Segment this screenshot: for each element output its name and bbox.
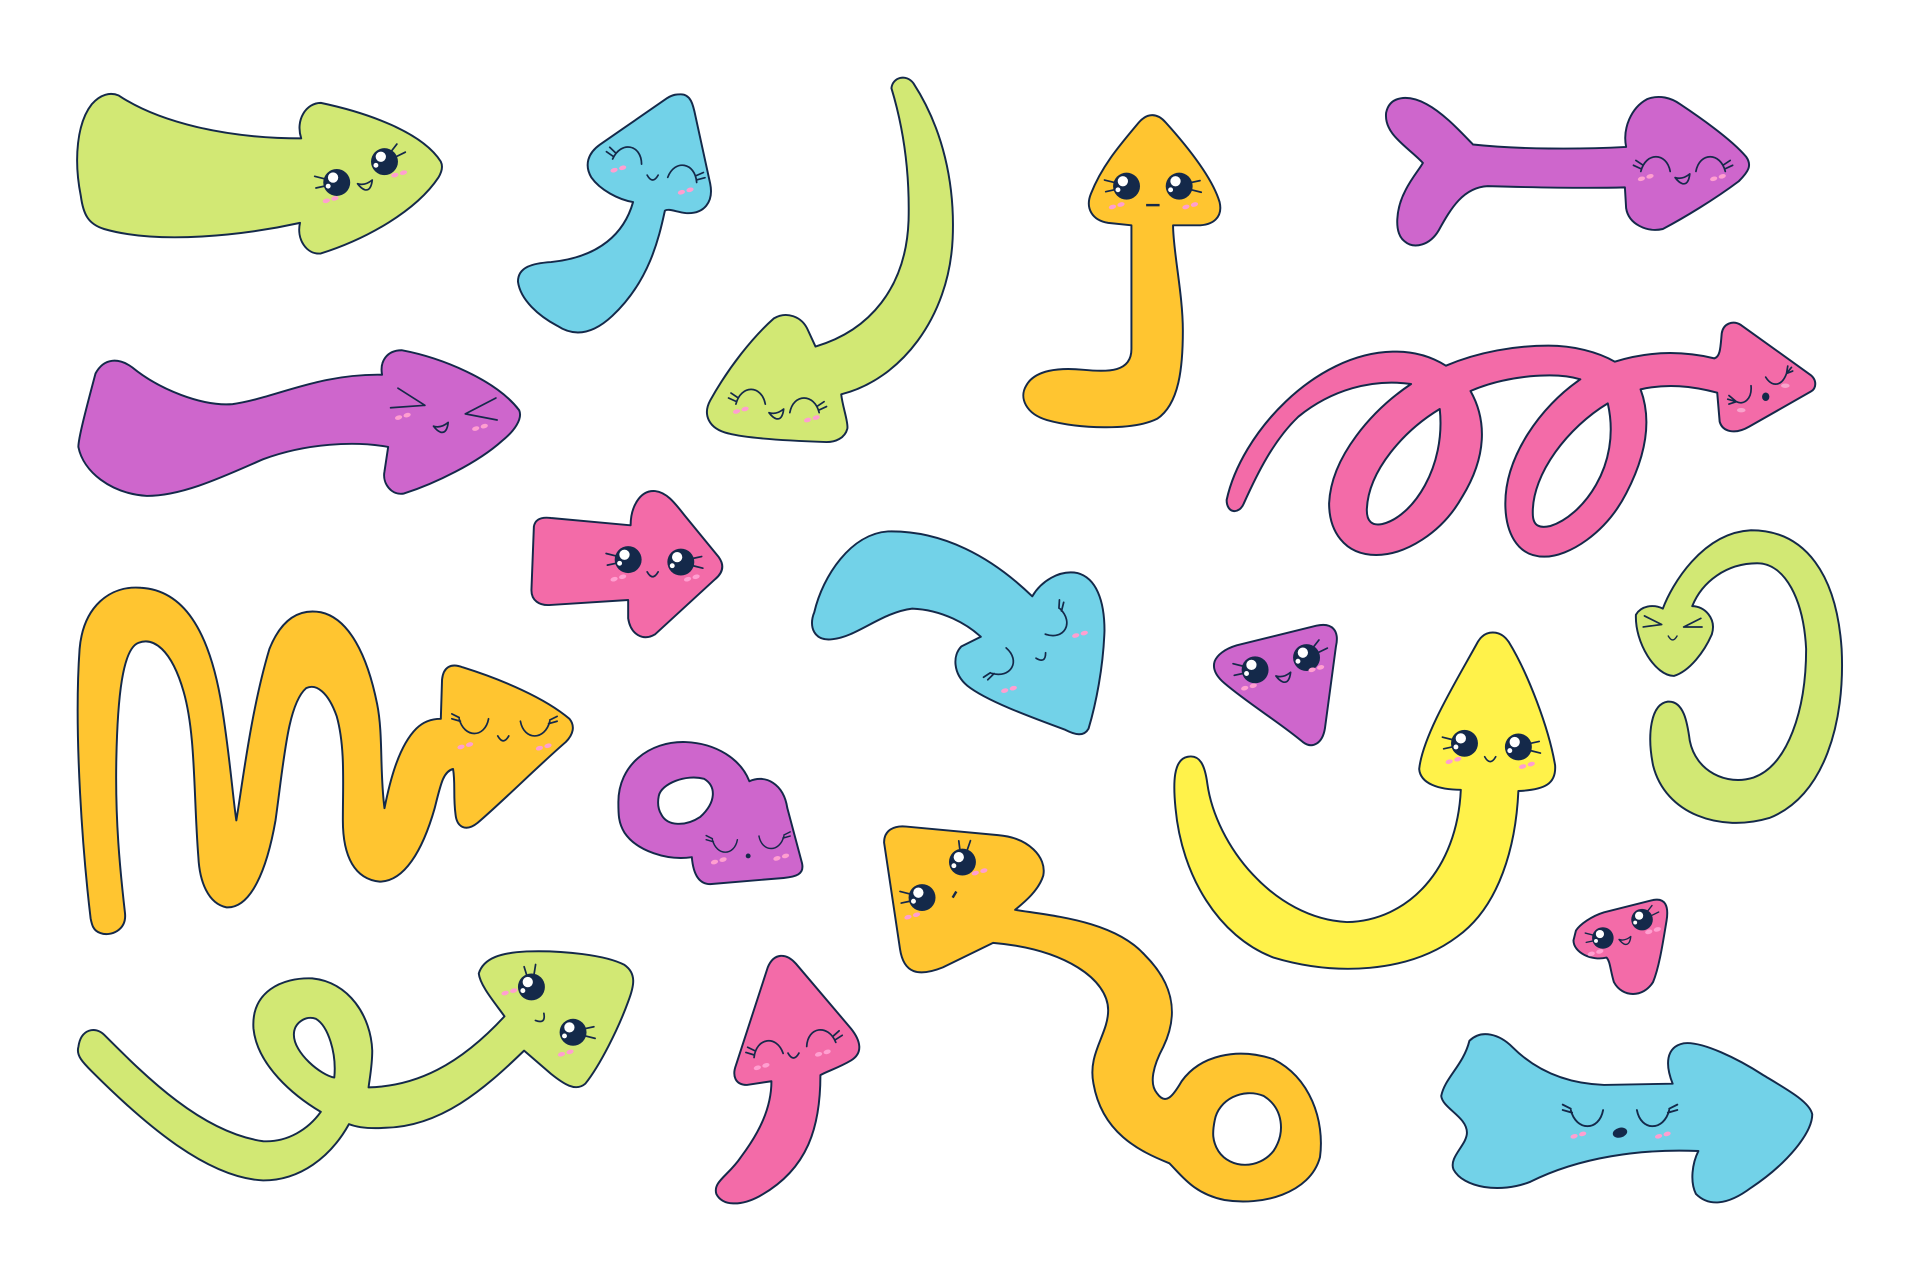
arrow 19: blue torn-tail arrow (1441, 1034, 1812, 1202)
arrow 12: yellow U arrow (1174, 632, 1555, 969)
arrow 3: lime long curved arrow (707, 78, 953, 442)
arrow 6: purple wavy arrow (78, 350, 520, 496)
body (884, 826, 1321, 1202)
arrow 10: blue bent arrow (812, 531, 1104, 734)
arrow 16: lime loop arrow (78, 951, 633, 1180)
body (812, 531, 1104, 734)
body (1441, 1034, 1812, 1202)
body (1023, 115, 1220, 427)
face (605, 143, 706, 195)
arrow 13: lime hook arrow (1636, 530, 1842, 823)
arrow 17: pink curved arrow (716, 956, 859, 1203)
body (78, 350, 520, 496)
body (78, 588, 573, 934)
arrow 15: orange ring-tail arrow (884, 826, 1321, 1202)
body (1174, 632, 1555, 969)
body (1227, 323, 1815, 557)
body (716, 956, 859, 1203)
face (1585, 905, 1661, 957)
body (1573, 900, 1667, 994)
face (391, 388, 497, 432)
face (900, 840, 988, 920)
face (745, 1027, 843, 1071)
body (707, 78, 953, 442)
face (1104, 173, 1201, 210)
face (452, 714, 557, 751)
arrow 1: lime wide arrow (77, 94, 442, 254)
face (1233, 639, 1327, 691)
body (618, 742, 802, 884)
arrow 8: orange squiggle arrow (78, 588, 573, 934)
body (1214, 625, 1337, 745)
face (501, 964, 595, 1057)
face (1633, 157, 1733, 184)
arrow 2: blue curved arrow (518, 94, 711, 333)
body (1636, 530, 1842, 823)
face (1728, 366, 1793, 412)
arrow 7: pink double spiral arrow (1227, 323, 1815, 557)
body (518, 94, 711, 333)
arrow 18: pink small triangle (1573, 900, 1667, 994)
face (1442, 730, 1540, 770)
face (706, 832, 790, 865)
arrow 4: orange J arrow (1023, 115, 1220, 427)
face (984, 600, 1088, 694)
face (729, 389, 827, 423)
body (78, 951, 633, 1180)
arrow 14: purple key shape (618, 742, 802, 884)
body (531, 491, 722, 637)
body (77, 94, 442, 254)
arrow 9: pink small arrow (531, 491, 722, 637)
arrow 11: purple triangle (1214, 625, 1337, 745)
body (1386, 97, 1749, 245)
face (1643, 616, 1702, 640)
arrow 5: purple fish-tail arrow (1386, 97, 1749, 245)
face (315, 143, 408, 204)
face (606, 546, 703, 582)
face (1563, 1105, 1677, 1139)
